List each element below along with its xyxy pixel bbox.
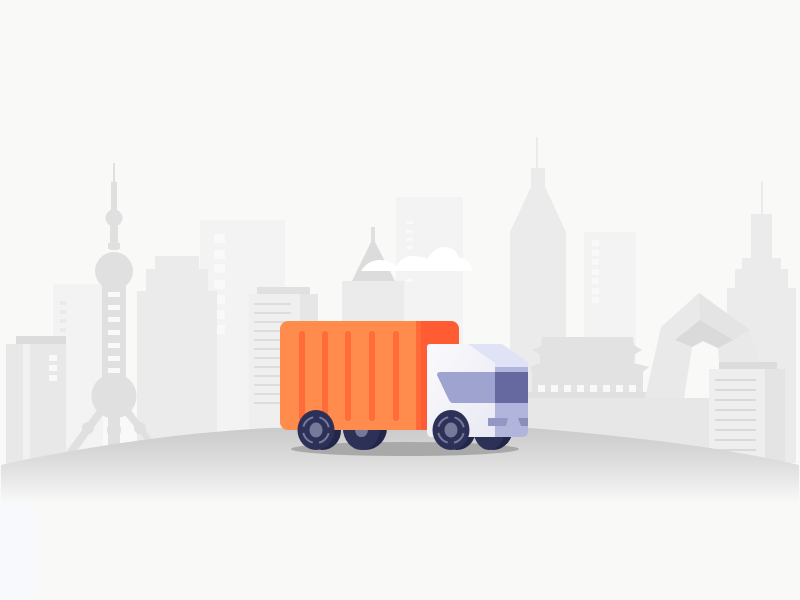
near front wheel (432, 410, 470, 450)
tower windows (108, 292, 120, 373)
low wall (528, 398, 710, 450)
building: stepped block (137, 256, 217, 441)
building: pointed tower (510, 137, 566, 400)
rear wheels behind cargo (304, 406, 387, 450)
lower left background tint (0, 503, 35, 600)
near front wheel shadow side (438, 411, 476, 450)
ground hill (1, 426, 799, 503)
cargo container (280, 321, 459, 430)
headlights (488, 418, 508, 426)
building: right front striped block (709, 362, 785, 464)
truck cab (427, 344, 528, 437)
delivery truck (280, 321, 528, 450)
CCTV headquarters building (645, 293, 759, 398)
far cab wheel (473, 406, 513, 450)
Tiananmen gate (528, 337, 649, 398)
building: far left front block (6, 336, 66, 464)
building: stepped skyscraper far right (727, 181, 796, 463)
cab window (437, 372, 495, 403)
building: striped block (249, 287, 318, 434)
building: back tower behind cloud (396, 197, 463, 397)
near rear wheel (298, 410, 334, 450)
Oriental Pearl tower (66, 163, 151, 452)
truck shadow (291, 442, 519, 456)
building: far left back tower (53, 284, 103, 464)
building: back tower with windows (584, 232, 636, 362)
building: spire block (342, 227, 404, 341)
cloud (361, 247, 473, 271)
cargo ribs (299, 331, 399, 421)
building: tall windowed back tower (200, 220, 285, 450)
middle wheel hub (355, 430, 368, 437)
